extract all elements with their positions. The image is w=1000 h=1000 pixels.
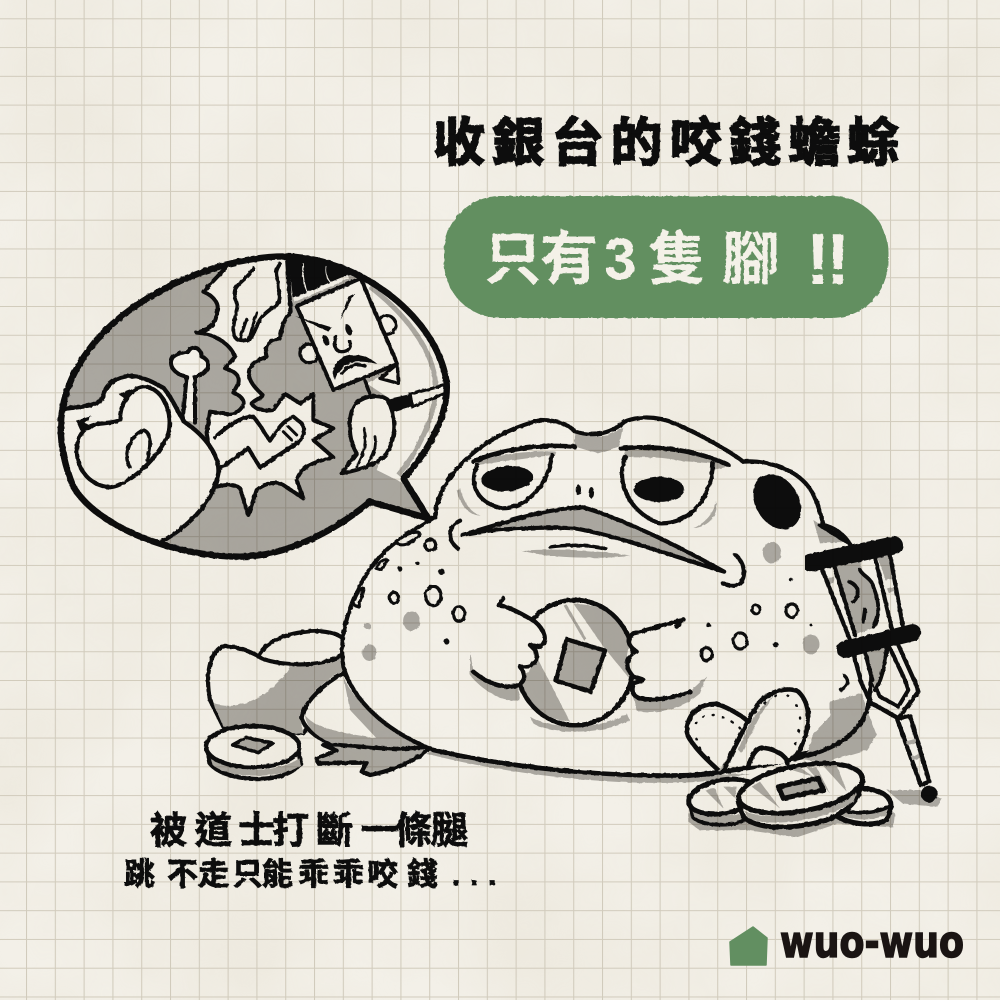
belly line xyxy=(433,750,713,776)
bubble outline xyxy=(61,256,447,557)
tip shadow xyxy=(887,790,942,807)
back eye spot xyxy=(744,468,810,535)
stack shadow xyxy=(688,790,895,837)
broken limb in burst xyxy=(215,417,304,467)
frog arm bone xyxy=(171,348,208,423)
logo wordmark: wuo-wuo xyxy=(780,917,964,968)
hand shadows xyxy=(470,652,707,732)
crutch upper part xyxy=(811,520,918,690)
official's face xyxy=(297,278,397,390)
front coin face xyxy=(735,755,866,822)
frog body xyxy=(53,376,218,553)
left hand xyxy=(470,605,545,687)
nose mustache mouth xyxy=(335,337,350,352)
caption line 1: 被道士打斷一條腿 xyxy=(150,810,468,851)
crutch lower fork xyxy=(860,680,918,718)
bubble fill xyxy=(61,256,447,557)
scene clipped to bubble xyxy=(64,259,444,542)
coin square hole xyxy=(556,639,605,692)
nostrils xyxy=(576,484,581,496)
warts left xyxy=(354,532,465,661)
ears xyxy=(300,344,319,363)
wrinkles xyxy=(456,488,717,528)
caption xyxy=(124,810,496,892)
left brow xyxy=(474,446,575,462)
toad contour inside crutch xyxy=(860,570,878,627)
body shadow behind feet xyxy=(805,693,877,762)
back left coin xyxy=(690,793,747,824)
brow shading xyxy=(575,427,623,453)
toad character xyxy=(342,417,871,783)
rear foot xyxy=(317,745,431,775)
official's arm and hand xyxy=(365,381,370,394)
right hand xyxy=(627,620,703,699)
green pill headline xyxy=(444,196,888,318)
rear leg xyxy=(302,673,423,749)
right brow xyxy=(621,447,728,465)
crutch hand grip xyxy=(845,633,913,649)
frog mouth and tongue xyxy=(77,387,170,487)
crutch top grip xyxy=(811,545,894,563)
pointing hand xyxy=(233,264,280,341)
crutch interior xyxy=(822,550,918,653)
eyebrows and eyes xyxy=(295,293,355,332)
front coin rim xyxy=(738,780,863,827)
ingot, left coin and hind leg xyxy=(206,631,432,779)
back shoulder xyxy=(813,520,847,543)
right back coin xyxy=(835,788,891,824)
toad body and head xyxy=(342,417,871,775)
held coin and hands xyxy=(470,598,707,732)
white area on the right of the official xyxy=(364,282,444,483)
pill text: 只有3隻腳 xyxy=(484,227,780,292)
coin disc xyxy=(516,600,634,725)
left coin xyxy=(207,745,301,779)
left sole xyxy=(687,704,748,772)
coin stripes xyxy=(573,603,631,680)
logo xyxy=(730,917,964,968)
right sole xyxy=(723,689,808,772)
caption line 2: 跳不走只能乖乖咬錢 xyxy=(124,857,438,892)
feet, coin stack and crutch base xyxy=(680,680,942,837)
crutch tip xyxy=(921,786,938,802)
mouth xyxy=(462,507,724,572)
right eye xyxy=(621,447,728,523)
right hand outline xyxy=(627,619,690,699)
left hand outline xyxy=(473,598,545,687)
warts right xyxy=(701,542,848,690)
ground shadow xyxy=(426,751,751,783)
left eye xyxy=(474,446,575,508)
crutch rails xyxy=(822,555,903,642)
ellipsis dots: ... xyxy=(452,859,496,892)
pill exclamation: !! xyxy=(806,220,850,300)
gold ingot xyxy=(208,631,344,733)
crutch stem xyxy=(897,716,929,785)
hat xyxy=(288,259,350,300)
heel pad xyxy=(748,748,787,766)
chin shadow xyxy=(521,550,630,558)
toad flank line xyxy=(680,700,870,777)
speech bubble with flashback scene xyxy=(53,253,460,557)
title: 收銀台的咬錢蟾蜍 xyxy=(433,115,907,173)
logo house icon xyxy=(730,927,767,965)
explosion burst xyxy=(197,253,333,515)
coin hole xyxy=(778,778,823,798)
